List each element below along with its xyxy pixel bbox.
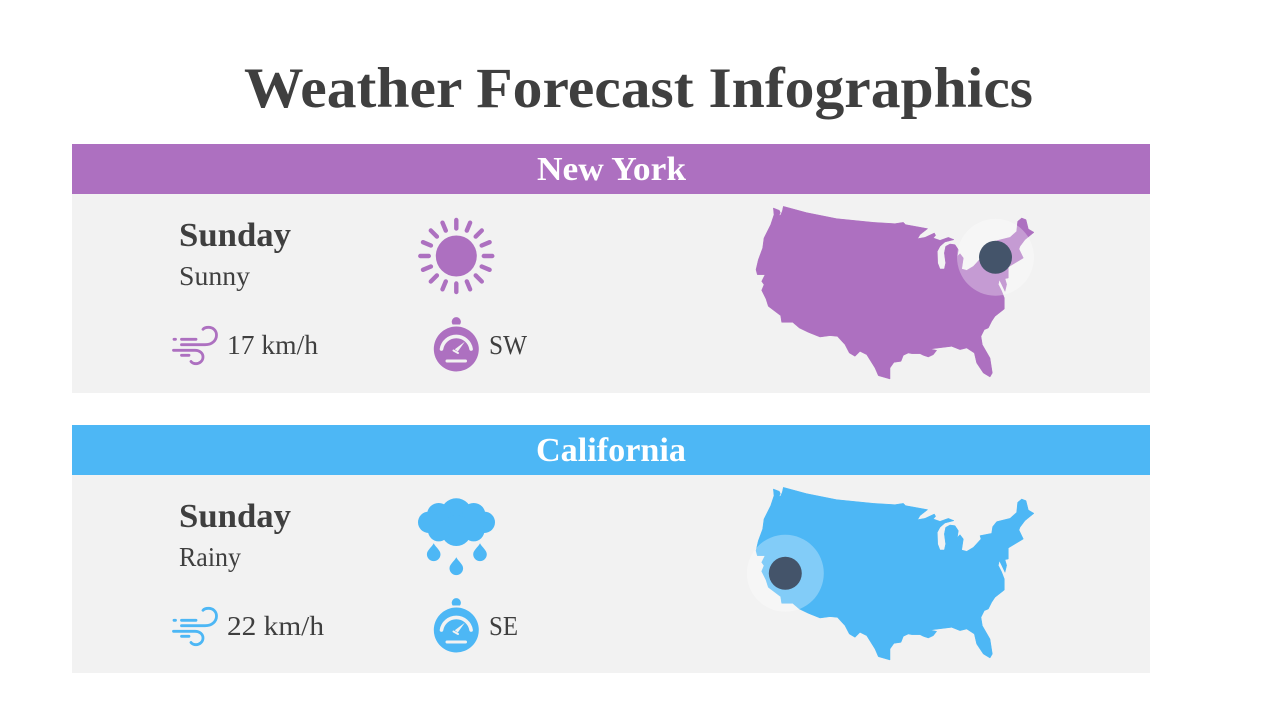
condition: Rainy: Rainy (179, 542, 241, 572)
header: New York: New York (537, 151, 686, 188)
panel: New York (72, 144, 1150, 393)
marker halo (957, 219, 1034, 296)
wind speed: 17 km/h (227, 330, 318, 360)
wind speed: 22 km/h (227, 611, 325, 641)
panel background: California (72, 475, 1150, 673)
marker dot (769, 557, 802, 590)
marker halo (747, 535, 824, 612)
icon: gauge (434, 598, 479, 652)
icon: sun (420, 220, 492, 292)
icon: gauge (434, 317, 479, 372)
icon: wind (174, 327, 216, 364)
title: Weather Forecast Infographics (244, 57, 1033, 120)
panel background: New York (72, 194, 1150, 393)
condition: Sunny: Sunny (179, 261, 250, 291)
wind direction: SW (489, 330, 527, 360)
header: California (72, 425, 1150, 475)
day: Sunday: Sunday (179, 217, 291, 254)
panel: California (72, 425, 1150, 673)
icon: wind (174, 608, 216, 645)
header: California: California (536, 432, 686, 469)
header: New York (72, 144, 1150, 194)
icon: rain cloud (418, 498, 495, 575)
map: USA with California marker (747, 487, 1034, 660)
day: Sunday: Sunday (179, 498, 291, 535)
marker dot (979, 241, 1012, 274)
map: USA with New York marker (756, 206, 1034, 379)
wind direction: SE (489, 611, 518, 641)
